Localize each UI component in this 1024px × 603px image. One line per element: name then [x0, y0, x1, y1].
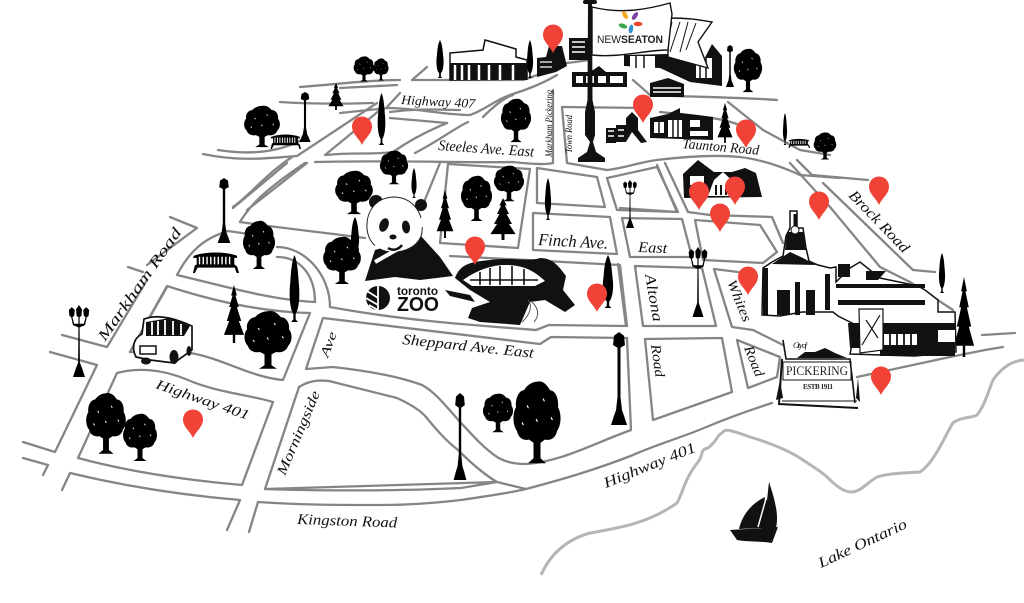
- bridge and river: [445, 258, 575, 325]
- trees: [86, 40, 974, 463]
- shoreline: [541, 360, 1024, 575]
- Toronto Zoo logo: [366, 284, 439, 316]
- flag: New Seaton: [592, 3, 712, 68]
- street labels: Highway 401: [600, 440, 698, 492]
- zoo wordmark: ZOO: [397, 294, 439, 316]
- street labels: Highway 401: [152, 377, 251, 424]
- panda: [365, 195, 453, 281]
- heritage house: [683, 160, 762, 198]
- street labels: Taunton Road: [682, 137, 761, 159]
- street labels: Steeles Ave. East: [438, 138, 535, 161]
- school: [650, 108, 713, 140]
- bus: [134, 317, 192, 364]
- street labels: Altona: [641, 272, 665, 323]
- sign year: ESTB 1911: [803, 383, 834, 391]
- street labels: Lake Ontario: [815, 516, 910, 572]
- street labels: Town Road: [564, 115, 574, 153]
- sign name: PICKERING: [786, 363, 848, 378]
- street labels: Kingston Road: [296, 512, 398, 532]
- street labels: Highway 407: [400, 92, 476, 111]
- sailboat: [730, 482, 778, 543]
- benches: [193, 135, 810, 273]
- street labels: Markham Pickering: [544, 90, 554, 158]
- New Seaton pinwheel logo: [618, 10, 642, 34]
- sign text: City of: [793, 341, 809, 350]
- street labels: East: [637, 240, 668, 257]
- street lamps: [69, 45, 734, 480]
- New Seaton wordmark: NEWSEATON: [597, 34, 663, 46]
- street labels: Markham Road: [94, 225, 186, 345]
- toronto wordmark: toronto: [397, 284, 438, 298]
- street labels: Sheppard Ave. East: [402, 332, 535, 362]
- street labels: [94, 90, 913, 572]
- playground: [606, 112, 647, 143]
- street labels: Ave: [316, 329, 340, 360]
- street labels: Road: [740, 343, 767, 380]
- Pickering sign: [776, 337, 860, 408]
- location pins: [183, 24, 891, 438]
- street labels: Finch Ave.: [537, 230, 609, 253]
- top buildings: [450, 38, 722, 97]
- flag pole: [578, 0, 605, 162]
- street labels: Brock Road: [845, 188, 913, 257]
- street labels: Morningside: [274, 389, 324, 479]
- street labels: Whites: [723, 278, 754, 325]
- road network: [23, 60, 1015, 532]
- street labels: Road: [647, 342, 667, 379]
- Pickering city hall: [762, 211, 956, 356]
